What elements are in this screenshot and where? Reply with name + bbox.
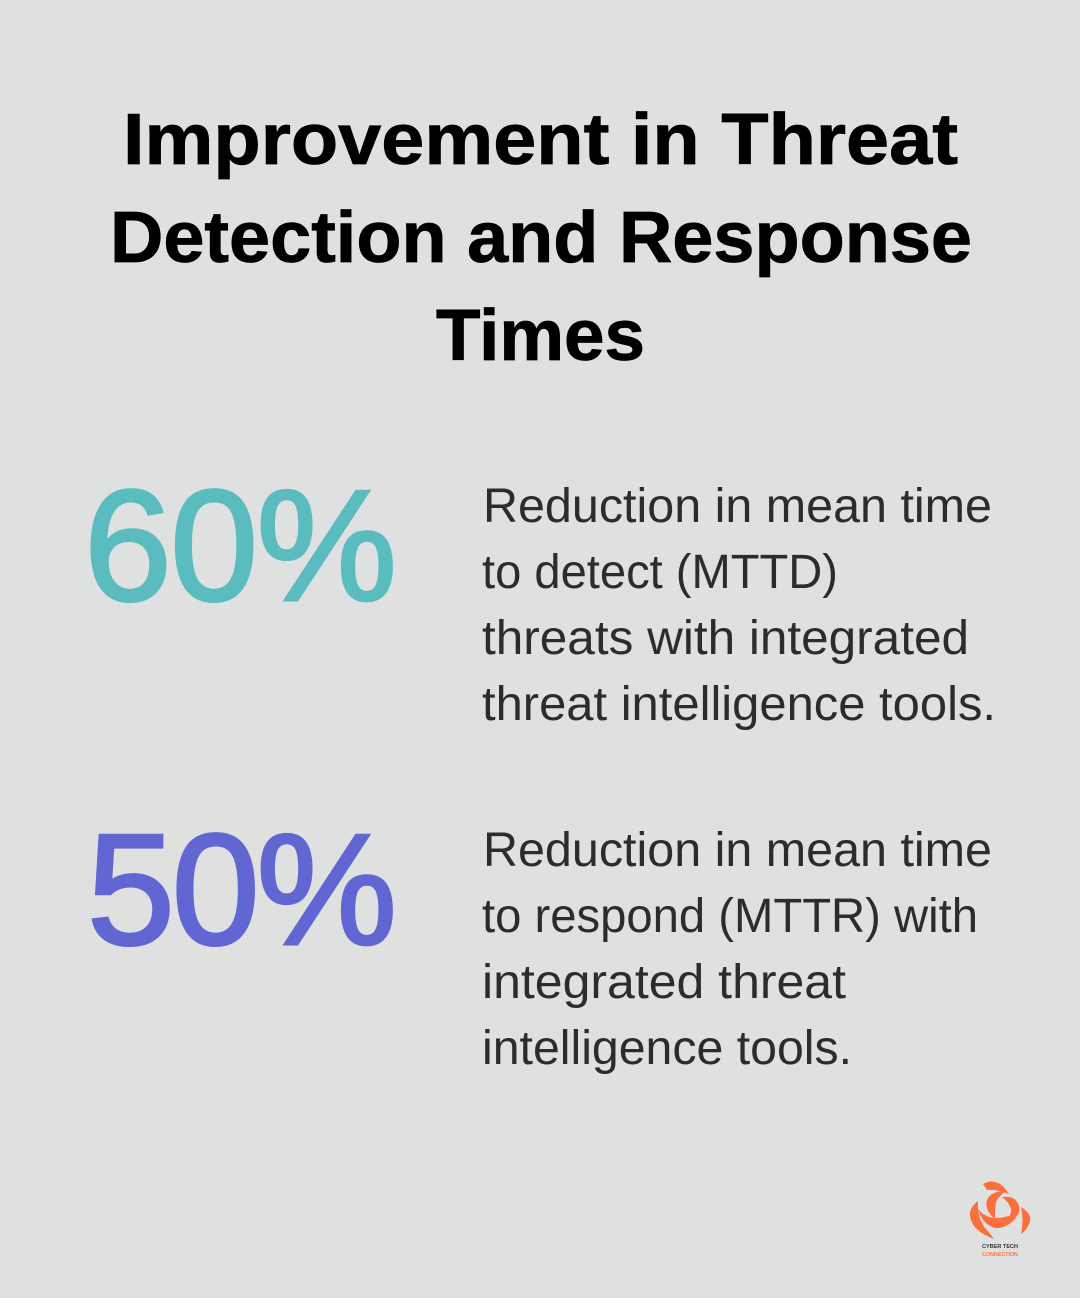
description: MTTD: Reduction in mean time bbox=[483, 480, 992, 533]
logo wordmark: CONNECTION bbox=[982, 1252, 1018, 1258]
title bbox=[110, 100, 972, 376]
logo: Cyber Tech Connection bbox=[970, 1182, 1030, 1258]
logo wordmark: CYBER TECH bbox=[982, 1244, 1018, 1250]
logo wordmark bbox=[982, 1244, 1018, 1258]
description: MTTD: threats with integrated bbox=[482, 612, 969, 665]
description: MTTR: intelligence tools. bbox=[482, 1022, 852, 1075]
title: Detection and Response bbox=[110, 198, 972, 278]
description: MTTD bbox=[482, 480, 996, 731]
title: Times bbox=[436, 296, 645, 376]
description: MTTR bbox=[482, 824, 992, 1075]
title: Improvement in Threat bbox=[123, 100, 958, 180]
statistic: 50%: 50% bbox=[87, 802, 397, 978]
description: MTTD: threat intelligence tools. bbox=[482, 678, 996, 731]
icon: three-blade swirl bbox=[970, 1182, 1030, 1239]
description: MTTR: Reduction in mean time bbox=[483, 824, 992, 877]
description: MTTR: to respond (MTTR) with bbox=[482, 890, 978, 943]
statistic: 60%: 60% bbox=[84, 458, 397, 634]
description: MTTR: integrated threat bbox=[482, 956, 846, 1009]
description: MTTD: to detect (MTTD) bbox=[482, 546, 838, 599]
